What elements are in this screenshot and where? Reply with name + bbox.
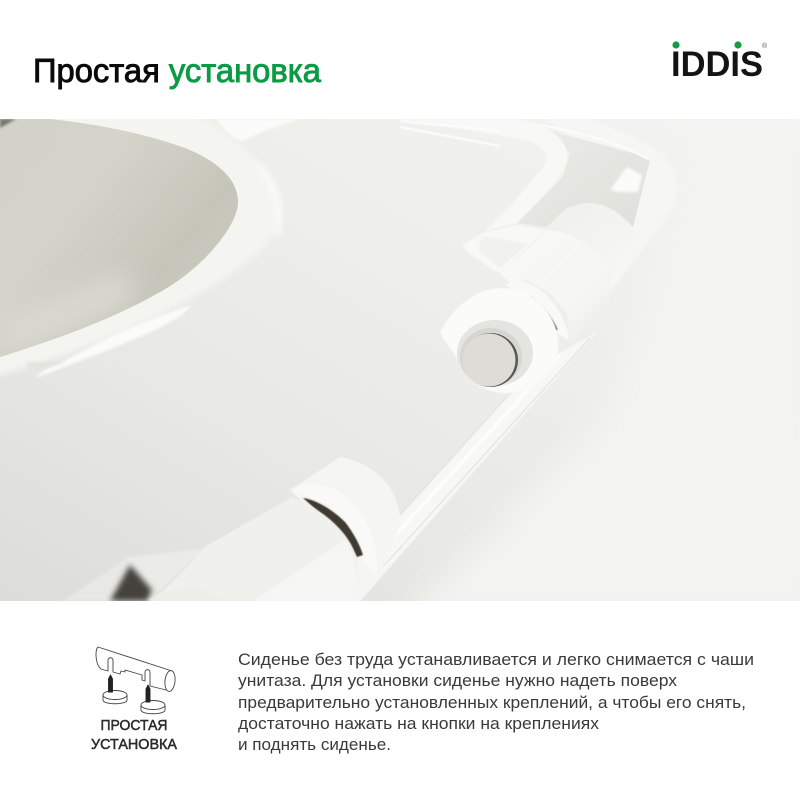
logo: IDDIS: ® [762, 42, 768, 50]
title: Простая установка [33, 52, 322, 89]
icon: seat tube with mounting screws [96, 647, 176, 714]
description text: унитаза. Для установки сиденье нужно надеть поверх [238, 671, 678, 690]
button ring [457, 320, 533, 386]
lower hinge [150, 457, 400, 601]
description text: достаточно нажать на кнопки на креплениях [238, 714, 600, 733]
feature block: easy installation: УСТАНОВКА [91, 737, 177, 753]
seat edge, upper right [400, 119, 567, 231]
upper hinge [440, 203, 637, 393]
block [150, 497, 358, 601]
outer ceramic frame, upper right [518, 124, 650, 278]
main block [501, 230, 596, 306]
outer ring [440, 288, 558, 393]
hinge bracket [462, 225, 547, 273]
description text: и поднять сиденье. [238, 735, 391, 754]
top seat detail [218, 119, 294, 140]
dark slit [303, 498, 363, 557]
icon caption: ПРОСТАЯ [100, 718, 168, 734]
lower left frame with dark gap [68, 552, 198, 601]
description text: предварительно установленных креплений, а чтобы его снять, [238, 693, 746, 712]
inner disk [505, 281, 568, 340]
disk [290, 457, 400, 600]
description text: Сиденье без труда устанавливается и легко снимается с чаши [238, 650, 754, 669]
button [472, 333, 518, 387]
feature block: easy installation [91, 647, 754, 754]
logo: IDDIS: IDDIS [671, 45, 763, 84]
toilet bowl opening [0, 110, 281, 378]
description text [238, 650, 754, 754]
diagonal frame strip [358, 335, 594, 601]
back cylinder [574, 203, 630, 224]
dark slit [530, 297, 557, 330]
lit surface right of the seat [426, 441, 800, 601]
photo: toilet seat hinges [0, 110, 800, 620]
